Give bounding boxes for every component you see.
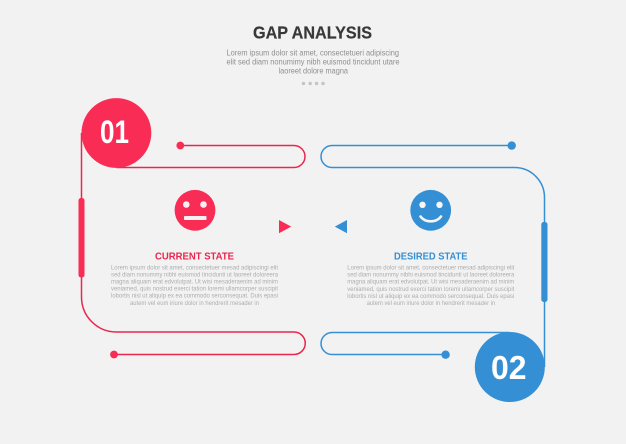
number badge 01: [82, 98, 151, 168]
subtitle: laoreet dolore magna: [278, 66, 349, 76]
text block: current state: veniamed, quis nostrud exerci tation loremi ullamcorper suscipit: [111, 286, 278, 293]
text block: desired state: sed diam nonummy nibhi euismod tincidunti ut laoreet doloreera: [347, 272, 515, 279]
text block: desired state: autem vel eum iriure dolor in hendrerit mesader in: [367, 300, 496, 307]
panel: current state: [78, 98, 305, 358]
text block: current state: Lorem ipsum dolor sit amet, consectetuer mesad adipiscingi elit: [111, 264, 278, 272]
heading: current state: CURRENT STATE: [155, 250, 234, 262]
text block: desired state: veniamed, quis nostrud exerci tation loremi ullamcorper suscipit: [347, 286, 515, 293]
icon: smiling face: [410, 190, 451, 231]
number badge 02: [475, 332, 545, 402]
number badge 01: 01: [100, 114, 129, 150]
text block: desired state: Lorem ipsum dolor sit amet, consectetuer mesad adipiscingi elit: [347, 265, 515, 272]
number badge 02: 02: [491, 349, 526, 386]
text block: current state: autem vel eum iriure dolor in hendrerit mesader in: [130, 300, 260, 307]
panel: desired state: [321, 141, 548, 402]
subtitle: [226, 48, 400, 76]
title: GAP ANALYSIS: [253, 22, 372, 42]
text block: current state: sed diam nonummy nibhi euismod tincidunti ut laoreet doloreera: [111, 272, 279, 279]
text block: current state: lobortis nisl ut aliquip ex ea commodo serconsequat. Duis epasi: [111, 293, 278, 300]
text block: desired state: lobortis nisl ut aliquip ex ea commodo serconsequat. Duis epasi: [347, 293, 514, 300]
connector end dot: top: [176, 142, 184, 149]
text block: desired state: magna aliquam erat edvolutpat. Ut wisi mesaderaenim ad minim: [347, 279, 514, 286]
arrow: left: [335, 220, 347, 233]
text block: current state: magna aliquam erat edvolutpat. Ut wisi mesaderaenim ad minim: [111, 279, 278, 286]
heading: desired state: DESIRED STATE: [394, 250, 468, 262]
thick bar: [78, 198, 84, 278]
connector end dot: bottom: [441, 350, 450, 359]
subtitle: Lorem ipsum dolor sit amet, consectetueri adipiscing: [226, 48, 399, 58]
connector line: blue: [321, 146, 544, 367]
text block: desired state: [347, 265, 515, 307]
connector line: red: [82, 133, 305, 354]
thick bar: [541, 222, 548, 302]
text block: current state: [111, 264, 279, 307]
icon: neutral face: [175, 190, 215, 231]
subtitle: elit sed diam nonumimy nibh euismod tincidunt utare: [226, 58, 400, 66]
arrow: right: [279, 220, 291, 233]
connector end dot: bottom: [110, 351, 118, 358]
connector end dot: top: [508, 141, 516, 150]
decorative dots: [302, 82, 325, 85]
